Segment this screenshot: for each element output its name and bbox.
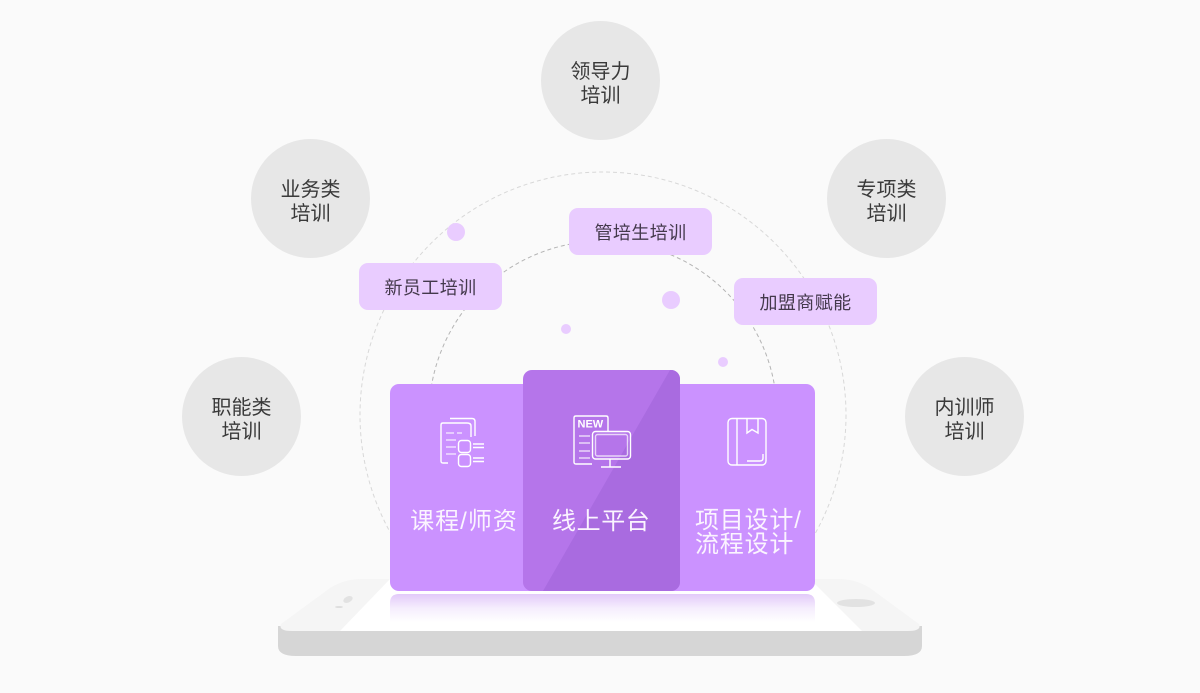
pill: franchisee enablement xyxy=(734,278,877,325)
card: online platform xyxy=(523,370,680,591)
label: online platform: 线上平台 xyxy=(552,508,650,535)
circle: special training: 培训 xyxy=(866,203,906,225)
pill: management trainee training: 管培生培训 xyxy=(594,223,686,243)
label: project design and process design: 项目设计/ xyxy=(695,507,802,534)
circle: functional training xyxy=(182,357,301,476)
dot xyxy=(718,357,728,367)
circle: business training: 培训 xyxy=(290,203,330,225)
card: courses and teachers xyxy=(390,384,815,591)
pill: new employee training: 新员工培训 xyxy=(384,278,476,298)
circle: special training xyxy=(827,139,946,258)
circle: internal trainer training: 培训 xyxy=(944,421,984,443)
dot xyxy=(447,223,465,241)
circle: internal trainer training: 内训师 xyxy=(934,397,994,419)
circle: business training xyxy=(251,139,370,258)
icon: new monitor: NEW xyxy=(578,418,604,430)
label: courses and teachers: 课程/师资 xyxy=(410,508,518,535)
circle: leadership training: 领导力 xyxy=(570,61,630,83)
circle: internal trainer training xyxy=(905,357,1024,476)
icon: book xyxy=(727,418,767,466)
dot xyxy=(561,324,571,334)
dot xyxy=(662,291,680,309)
icon: new monitor xyxy=(573,415,632,468)
circle: leadership training xyxy=(541,21,660,140)
icon: course documents xyxy=(440,418,484,468)
circle: business training: 业务类 xyxy=(280,179,340,201)
label: project design and process design: 流程设计 xyxy=(695,531,794,558)
pill: franchisee enablement: 加盟商赋能 xyxy=(760,293,852,313)
pill: new employee training xyxy=(359,263,502,310)
pill: management trainee training xyxy=(569,208,712,255)
circle: functional training: 培训 xyxy=(222,421,262,443)
circle: functional training: 职能类 xyxy=(212,397,272,419)
label: project design and process design xyxy=(695,507,802,558)
circle: leadership training: 培训 xyxy=(580,85,620,107)
circle: special training: 专项类 xyxy=(856,179,916,201)
